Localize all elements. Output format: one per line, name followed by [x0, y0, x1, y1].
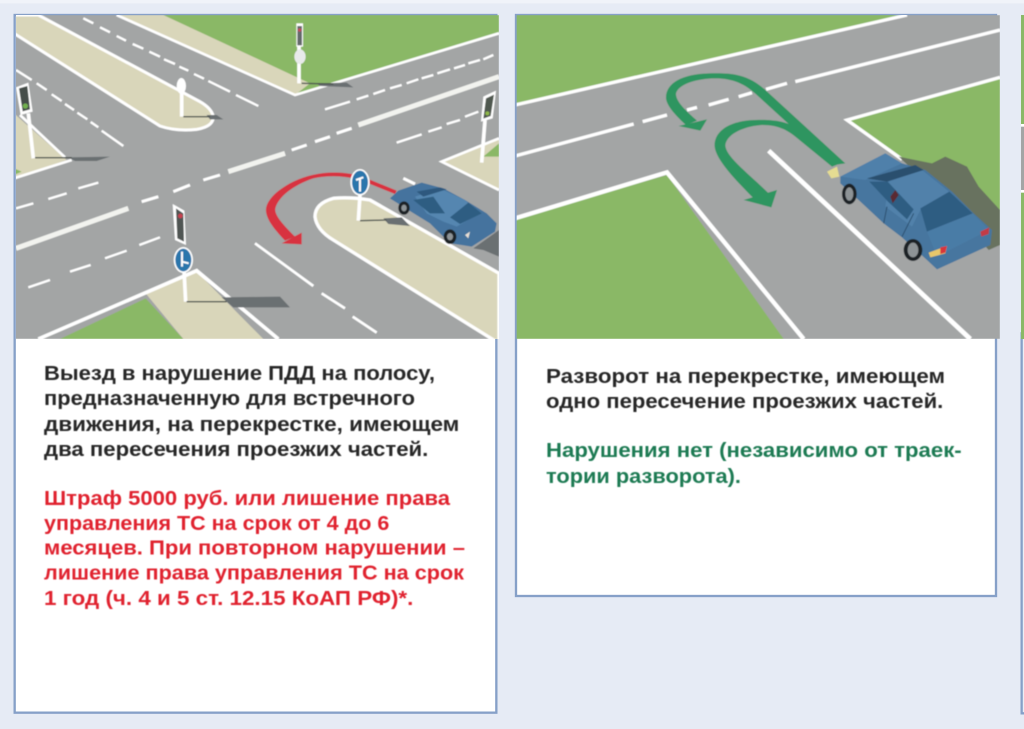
text block: left penalty in red: 1 год (ч. 4 и 5 ст. 12.15 КоАП РФ)*. [44, 588, 413, 610]
text block: right description: одно пересечение проезжих частей. [546, 391, 943, 413]
text box: left panel frame [15, 15, 496, 713]
text block: left description: предназначенную для встречного [44, 388, 415, 410]
text block: right description [546, 366, 945, 413]
text block: right verdict in green: Нарушения нет (независимо от траек- [546, 440, 962, 462]
text block: left penalty in red: Штраф 5000 руб. или лишение права [44, 488, 451, 510]
text block: right verdict in green [546, 440, 962, 488]
text block: left penalty in red: лишение права управления ТС на срок [44, 562, 465, 584]
arrow: green U-turn paths [666, 73, 845, 207]
text block: left description [44, 363, 459, 461]
panel: double-crossing intersection [14, 15, 499, 713]
text block: left description: два пересечения проезжих частей. [44, 439, 428, 461]
text box: right panel frame [516, 15, 996, 596]
text block: left description: движения, на перекрестке, имеющем [44, 414, 459, 436]
poles and traffic lights [16, 23, 496, 302]
panel: far-right cropped neighbour [1021, 15, 1024, 713]
road markings [16, 18, 499, 333]
text block: left penalty in red: управления ТС на срок от 4 до 6 [44, 513, 389, 535]
icon: blue car [390, 183, 497, 247]
arrow: red illegal turn [266, 172, 397, 244]
illustration: T intersection with one crossing [515, 15, 1000, 339]
text block: left penalty in red: месяцев. При повторном нарушении – [44, 537, 465, 559]
panel: single-crossing intersection [515, 15, 1000, 596]
icon: large blue car [827, 153, 992, 269]
text block: left description: Выезд в нарушение ПДД на полосу, [44, 363, 435, 385]
shadows [68, 83, 499, 307]
text block: right description: Разворот на перекрестке, имеющем [546, 366, 945, 388]
text block: right verdict in green: тории разворота). [546, 466, 741, 488]
text block: left penalty in red [44, 488, 465, 610]
icon: blue direction signs [174, 169, 370, 273]
icon: car shadow [899, 157, 1000, 250]
illustration: intersection with two carriageway crossings [14, 15, 499, 343]
